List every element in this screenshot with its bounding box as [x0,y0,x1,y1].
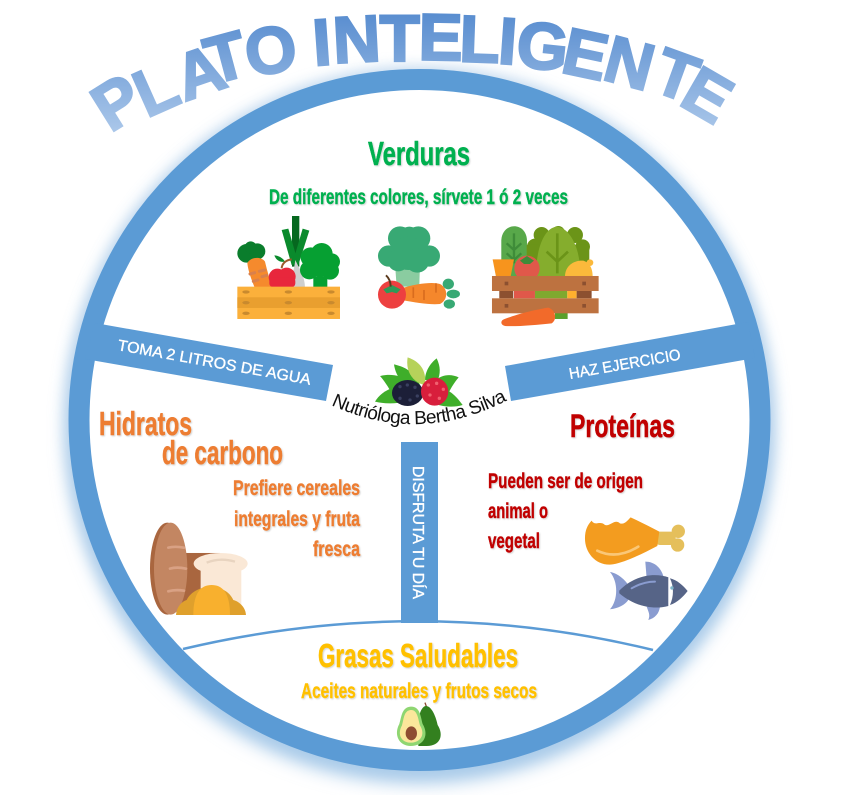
heading: Hidratos de carbono: de carbono [162,434,283,471]
text: protein note: animal o [488,499,548,523]
text: vegetables note: De diferentes colores, sírvete 1 ó 2 veces [269,186,568,209]
divider: healthy fats arc [183,621,653,650]
icon: broccoli, tomato and carrot [378,226,460,309]
text: carbohydrates note: Prefiere cereales [233,477,360,500]
icon: fish [610,562,688,620]
icon: logo berries and leaves [375,357,463,407]
icon: bread and croissant [150,523,248,615]
heading: Hidratos de carbono [99,405,283,471]
band: enjoy your day: DISFRUTA TU DÍA [409,466,426,600]
icon: wooden crate of produce [492,226,599,326]
text: protein note [488,469,643,553]
logo text: Nutrióloga Bertha Silva [332,392,508,427]
text: protein note: vegetal [488,529,540,553]
band: water: TOMA 2 LITROS DE AGUA [116,337,313,389]
text: healthy fats note: Aceites naturales y frutos secos [301,679,537,703]
text: carbohydrates note: fresca [313,538,360,561]
band: exercise [505,322,755,401]
band: exercise: HAZ EJERCICIO [568,347,682,383]
heading: Grasas Saludables: Grasas Saludables [318,637,518,674]
text: carbohydrates note: integrales y fruta [234,508,360,531]
band: enjoy your day [401,442,438,623]
heading: Proteínas: Proteínas [570,408,675,444]
icon: chicken leg [585,517,685,565]
plate glow [64,66,774,783]
icon: avocado [397,703,441,746]
text: carbohydrates note [233,477,360,561]
heading: Hidratos de carbono: Hidratos [99,405,192,442]
plate ring [79,80,760,760]
heading: Verduras: Verduras [368,135,470,172]
icon: vegetable crate [237,216,340,319]
text: protein note: Pueden ser de origen [488,469,643,493]
title: PLATO INTELIGENTE [79,0,745,145]
band: water [85,323,333,401]
